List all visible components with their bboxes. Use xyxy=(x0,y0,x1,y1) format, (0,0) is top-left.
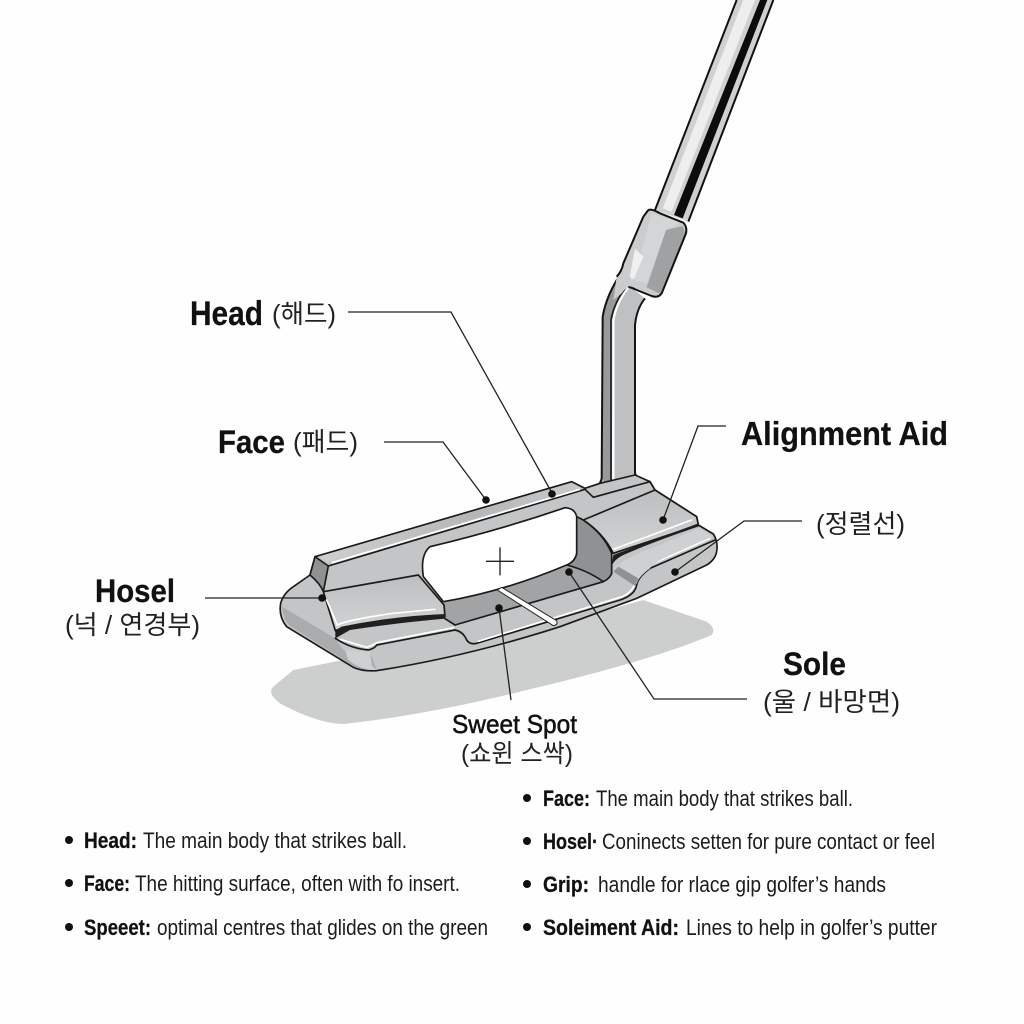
item: Face: Face: xyxy=(84,871,130,896)
right ledge shadow xyxy=(613,528,713,584)
leader: alignment line Korean xyxy=(671,521,802,576)
ridge top shade xyxy=(318,483,580,562)
ledge highlight xyxy=(340,538,710,647)
alignment line xyxy=(497,587,557,626)
label: Sweet Spot: (쇼윈 스싹) xyxy=(461,740,573,768)
leader: Sweet Spot xyxy=(495,604,511,700)
item: Head: Head: xyxy=(84,828,137,853)
right description list xyxy=(523,786,937,940)
label: Sole xyxy=(763,646,900,717)
ridge highlight xyxy=(332,489,580,563)
label: Hosel: Hosel xyxy=(95,573,175,609)
item: Head: The main body that strikes ball. xyxy=(143,828,407,853)
item: Speeet: optimal centres that glides on the green xyxy=(157,915,488,940)
label: Alignment Aid: Alignment Aid xyxy=(741,415,948,452)
heel facet xyxy=(310,557,328,592)
centre floor line xyxy=(445,582,603,625)
item: Soleiment Aid xyxy=(523,915,937,940)
leader: Head xyxy=(348,312,556,498)
item: Face xyxy=(523,786,853,811)
label: Face xyxy=(218,424,358,460)
leader: Sole xyxy=(565,568,747,699)
hosel neck xyxy=(590,270,645,497)
label: Head xyxy=(190,295,336,333)
ground shadow xyxy=(271,600,713,724)
leader: Alignment Aid xyxy=(659,426,726,524)
crosshair xyxy=(486,547,514,575)
center dark recess xyxy=(443,565,610,625)
left block highlight xyxy=(327,600,435,625)
item: Face: The hitting surface, often with fo insert. xyxy=(135,871,460,896)
label: Sole: (울 / 바망면) xyxy=(763,687,900,717)
right block dark lower edge xyxy=(612,523,700,567)
item: Soleiment Aid: Lines to help in golfer’s putter xyxy=(686,915,937,940)
item: Grip: handle for rlace gip golfer’s hands xyxy=(598,872,886,897)
head body xyxy=(280,475,717,671)
item: Hosel: Hosel· xyxy=(543,829,598,854)
label: Head: (해드) xyxy=(272,299,336,329)
item: Head xyxy=(65,828,407,853)
item: Hosel: Coninects setten for pure contact or feel xyxy=(602,829,935,854)
right block highlight xyxy=(613,520,692,549)
right block xyxy=(583,490,698,553)
leader: Hosel xyxy=(205,594,326,602)
label: Face: Face xyxy=(218,424,285,460)
left block xyxy=(323,575,445,631)
label: Face: (패드) xyxy=(293,427,358,457)
top ridge xyxy=(328,489,585,566)
leader: Face xyxy=(384,442,490,504)
label: Sweet Spot xyxy=(452,709,578,768)
label: alignment line Korean: (정렬선) xyxy=(816,509,905,539)
item: Speeet xyxy=(65,915,488,940)
left description list xyxy=(65,828,488,940)
right block top edge xyxy=(585,482,655,497)
right cavity wall xyxy=(567,517,612,582)
item: Face: Face: xyxy=(543,786,590,811)
item: Grip: Grip: xyxy=(543,872,589,897)
item: Speeet: Speeet: xyxy=(84,915,151,940)
label: Hosel: (넉 / 연경부) xyxy=(65,610,200,640)
left block dark lower edge xyxy=(335,614,445,638)
left ledge outline xyxy=(335,540,715,650)
shaft xyxy=(655,0,773,222)
label: Hosel xyxy=(65,573,200,640)
label: Sweet Spot: Sweet Spot xyxy=(452,709,578,739)
label: Sole: Sole xyxy=(783,646,846,682)
toe outer shading xyxy=(282,607,377,670)
label: Head: Head xyxy=(190,295,263,333)
item: Face: The main body that strikes ball. xyxy=(596,786,853,811)
putter head xyxy=(280,475,717,671)
item: Soleiment Aid: Soleiment Aid: xyxy=(543,915,679,940)
face insert window xyxy=(422,508,577,602)
hosel collar xyxy=(613,210,686,300)
